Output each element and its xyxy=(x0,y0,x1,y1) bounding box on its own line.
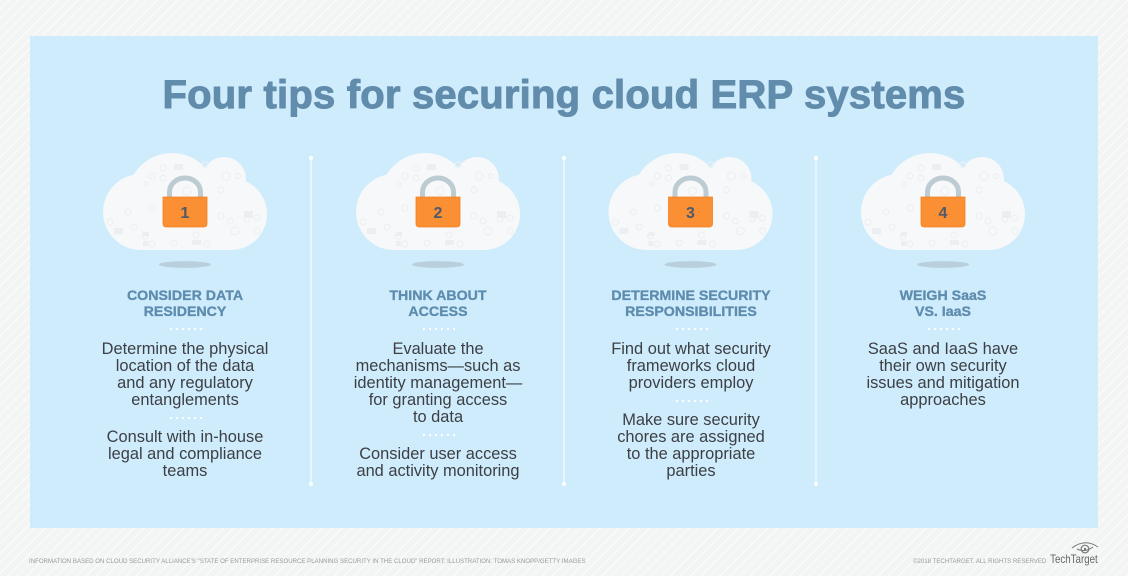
text: tip 4 point: SaaS and IaaS have xyxy=(868,340,1018,358)
text: tip 3 first point: providers employ xyxy=(629,374,753,392)
text: tip 4 point: approaches xyxy=(900,391,986,409)
text: tip 1 second point: teams xyxy=(163,462,207,480)
text: tip 3 second point xyxy=(617,411,765,480)
dots xyxy=(170,328,202,330)
text: tip 2 first point: to data xyxy=(413,408,463,426)
text: tip 2 first point: for granting access xyxy=(369,391,507,409)
icon: cloud lock 4: 4 xyxy=(939,205,948,222)
panel: tip 2 xyxy=(354,288,522,480)
heading: tip 4: WEIGH SaaS xyxy=(900,288,986,304)
text: tip 2 second point: and activity monitoring xyxy=(356,462,520,480)
text: tip 1 second point: Consult with in-house xyxy=(107,428,263,446)
heading: tip 3: RESPONSIBILITIES xyxy=(625,304,757,320)
text: tip 1 first point: Determine the physical xyxy=(102,340,268,358)
heading: tip 4: VS. IaaS xyxy=(915,304,971,320)
heading: tip 2 xyxy=(389,288,487,320)
dots xyxy=(928,328,960,330)
heading: tip 3 xyxy=(611,288,771,320)
text: tip 3 first point: Find out what security xyxy=(611,340,771,358)
text: tip 3 first point: frameworks cloud xyxy=(627,357,755,375)
heading: tip 2: THINK ABOUT xyxy=(389,288,487,304)
text: tip 1 first point: and any regulatory xyxy=(117,374,253,392)
icon: cloud lock 3: 3 xyxy=(686,205,695,222)
icon: cloud lock 4 xyxy=(861,153,1025,268)
logo wordmark: TechTarget xyxy=(1050,552,1098,566)
dots xyxy=(423,434,455,436)
panel: tip 4 xyxy=(866,288,1020,409)
text: tip 2 first point: mechanisms—such as xyxy=(356,357,520,375)
text: tip 3 second point: Make sure security xyxy=(622,411,760,429)
source note: INFORMATION BASED ON CLOUD SECURITY ALLIANCE'S "STATE OF ENTERPRISE RESOURCE PLANNING SECURITY IN THE CLOUD" REPORT; ILLUSTRATION: TOMAS KNOPP/GETTY IMAGES xyxy=(29,558,586,565)
logo: TechTarget xyxy=(1050,542,1098,566)
text: tip 3 second point: chores are assigned xyxy=(617,428,765,446)
copyright: ©2018 TECHTARGET. ALL RIGHTS RESERVED xyxy=(913,558,1046,565)
dots xyxy=(170,417,202,419)
text: tip 2 second point xyxy=(356,445,520,480)
icon: eye xyxy=(1072,542,1098,554)
text: tip 1 first point: entanglements xyxy=(131,391,239,409)
panel: tip 1 xyxy=(102,288,268,480)
heading: tip 1 xyxy=(127,288,243,320)
heading: tip 1: CONSIDER DATA xyxy=(127,288,243,304)
heading: tip 2: ACCESS xyxy=(408,304,468,320)
icon: cloud lock 2: 2 xyxy=(434,205,443,222)
text: tip 4 point xyxy=(866,340,1020,409)
text: tip 4 point: issues and mitigation xyxy=(866,374,1020,392)
dots xyxy=(676,400,708,402)
text: tip 3 first point xyxy=(611,340,771,392)
icon: cloud lock 1: 1 xyxy=(181,205,190,222)
heading: tip 4 xyxy=(900,288,986,320)
dots xyxy=(676,328,708,330)
text: tip 4 point: their own security xyxy=(879,357,1007,375)
icon: cloud lock 3 xyxy=(608,153,772,268)
text: tip 2 first point: Evaluate the xyxy=(392,340,484,358)
text: tip 3 second point: to the appropriate xyxy=(627,445,755,463)
panel: tip 3 xyxy=(611,288,771,480)
heading: tip 3: DETERMINE SECURITY xyxy=(611,288,771,304)
text: tip 1 first point: location of the data xyxy=(116,357,254,375)
text: tip 1 first point xyxy=(102,340,268,409)
text: tip 1 second point: legal and compliance xyxy=(108,445,262,463)
dots xyxy=(423,328,455,330)
text: tip 2 first point xyxy=(354,340,522,426)
icon: cloud lock 2 xyxy=(356,153,520,268)
icon: cloud lock 1 xyxy=(103,153,267,268)
title: Four tips for securing cloud ERP systems xyxy=(162,73,966,117)
heading: tip 1: RESIDENCY xyxy=(144,304,226,320)
text: tip 2 first point: identity management— xyxy=(354,374,522,392)
text: tip 3 second point: parties xyxy=(666,462,716,480)
text: tip 1 second point xyxy=(107,428,263,480)
text: tip 2 second point: Consider user access xyxy=(359,445,517,463)
